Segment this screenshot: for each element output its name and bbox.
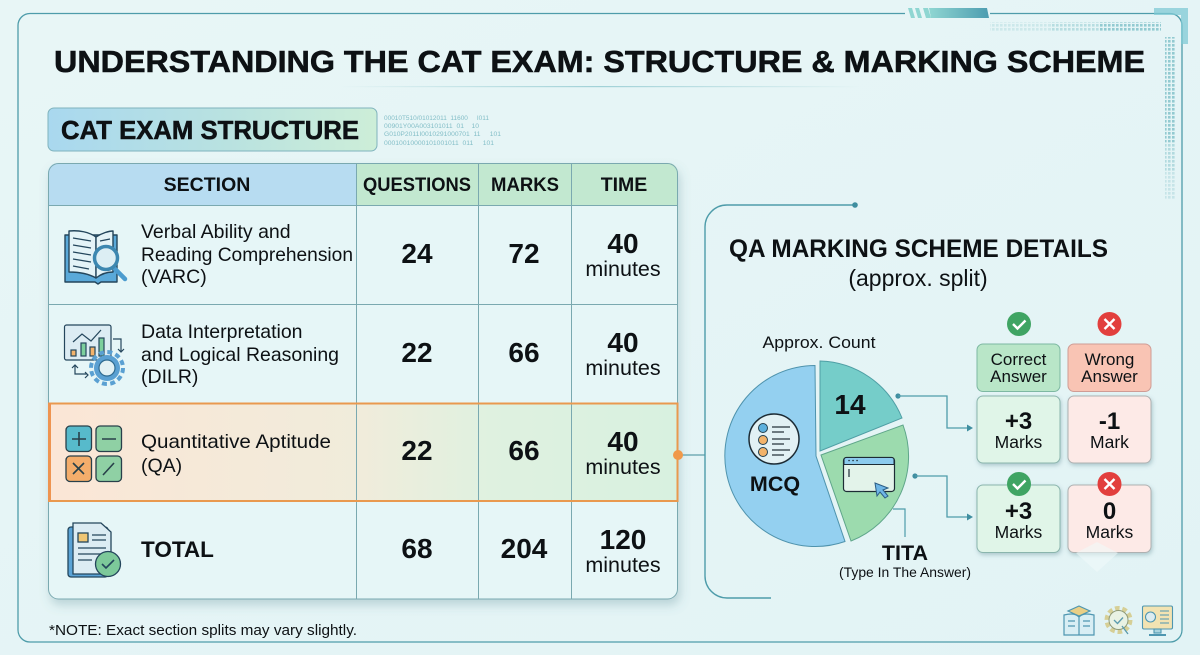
TITA label	[839, 509, 971, 580]
arrow: slice to TITA marks	[912, 473, 973, 520]
icon: correct check bottom	[1007, 472, 1031, 496]
table: exam structure	[48, 163, 678, 599]
table header: MARKS	[491, 174, 559, 196]
icon: correct check top	[1007, 312, 1031, 336]
table header: SECTION	[164, 174, 250, 196]
row: total: 68	[401, 533, 433, 564]
decorative binary text: G010P2011I0010291000701 11 101	[384, 131, 501, 138]
row: VARC: 72	[508, 238, 540, 269]
slice: MCQ: MCQ	[750, 472, 800, 496]
icon: answer window with cursor	[844, 458, 894, 498]
row: VARC	[65, 221, 661, 288]
row: DILR: minutes	[585, 356, 661, 380]
header card: correct answer: Correct	[991, 350, 1047, 369]
icon: wrong cross bottom	[1098, 472, 1122, 496]
row: QA highlighted: 66	[508, 435, 540, 466]
row: VARC: Reading Comprehension	[141, 244, 353, 266]
icon: book and graduation cap	[1064, 606, 1094, 635]
slice: MCQ	[725, 366, 845, 546]
icon: chart with gear	[64, 325, 124, 384]
header card: wrong answer: Answer	[1081, 367, 1138, 386]
header card: correct answer	[977, 344, 1060, 392]
row: QA highlighted: (QA)	[141, 455, 182, 477]
decorative binary text: 00010T510/01012011 11600 I011	[384, 115, 489, 122]
header card: wrong answer: Wrong	[1085, 350, 1134, 369]
card: TITA wrong 0: 0	[1103, 498, 1116, 525]
card: TITA correct +3: +3	[1005, 498, 1032, 525]
slice: 14	[820, 361, 902, 451]
arrow: slice to MCQ marks	[895, 393, 973, 432]
card: TITA wrong 0	[1068, 485, 1151, 572]
note: *NOTE: Exact section splits may vary slightly.	[49, 623, 357, 639]
connector from QA row to panel	[673, 450, 705, 460]
row: DILR: 66	[508, 337, 540, 368]
icon: monitor dashboard	[1142, 606, 1172, 635]
row: DILR: Data Interpretation	[141, 321, 303, 343]
row: DILR: and Logical Reasoning	[141, 344, 339, 366]
row: QA highlighted: 40	[607, 426, 639, 457]
icon: gear and bulb	[1107, 608, 1130, 634]
card: MCQ correct +3	[977, 396, 1060, 463]
slice: 14: 14	[834, 389, 866, 420]
title: UNDERSTANDING THE CAT EXAM: STRUCTURE & MARKING SCHEME	[54, 44, 1145, 79]
row: QA highlighted: minutes	[585, 455, 661, 479]
row: total: TOTAL	[141, 537, 214, 562]
icon: wrong cross top	[1098, 312, 1122, 336]
row: total: 204	[501, 533, 548, 564]
row: DILR: (DILR)	[141, 366, 198, 388]
table header: TIME	[601, 174, 647, 196]
row: total: minutes	[585, 553, 661, 577]
row: VARC: 40	[607, 228, 639, 259]
section heading: CAT exam structure	[48, 108, 377, 151]
pie label: Approx. Count	[762, 333, 876, 352]
row: total: 120	[600, 524, 646, 555]
TITA label: (Type In The Answer)	[839, 565, 971, 580]
panel bracket	[705, 202, 858, 598]
row: VARC: Verbal Ability and	[141, 221, 291, 243]
card: TITA correct +3: Marks	[995, 522, 1043, 542]
row: VARC: minutes	[585, 257, 661, 281]
row: DILR	[64, 321, 661, 388]
row: QA highlighted: Quantitative Aptitude	[141, 431, 331, 453]
row: total	[68, 523, 661, 577]
row: VARC: 24	[401, 238, 433, 269]
section heading: CAT exam structure: CAT EXAM STRUCTURE	[61, 115, 359, 145]
decorative binary text	[384, 115, 501, 147]
row: QA highlighted	[66, 426, 661, 482]
slice: TITA	[821, 425, 909, 541]
card: MCQ wrong -1: -1	[1099, 408, 1120, 435]
header card: correct answer: Answer	[990, 367, 1047, 386]
row: DILR: 22	[401, 337, 433, 368]
row: VARC: (VARC)	[141, 266, 207, 288]
pie chart	[725, 361, 909, 546]
TITA label: TITA	[882, 541, 928, 565]
decorative binary text: 00010010000101001011 011 101	[384, 140, 494, 147]
row: DILR: 40	[607, 327, 639, 358]
card: MCQ wrong -1: Mark	[1090, 432, 1129, 452]
header card: wrong answer	[1068, 344, 1151, 392]
card: MCQ correct +3: +3	[1005, 408, 1032, 435]
panel heading: QA MARKING SCHEME DETAILS	[729, 235, 1108, 263]
table header: QUESTIONS	[363, 174, 471, 196]
table header	[164, 174, 647, 196]
panel heading	[729, 235, 1108, 291]
icon: document with check	[68, 523, 120, 577]
panel heading: (approx. split)	[848, 265, 988, 291]
card: MCQ correct +3: Marks	[995, 432, 1043, 452]
icon: MCQ list	[749, 414, 799, 464]
row: QA highlighted: 22	[401, 435, 433, 466]
card: TITA correct +3	[977, 485, 1060, 552]
icon: open book with magnifier	[65, 231, 125, 284]
card: MCQ wrong -1	[1068, 396, 1151, 463]
icon: math operators	[66, 426, 122, 482]
card: TITA wrong 0: Marks	[1086, 522, 1134, 542]
decorative binary text: 00901Y00A003101011 01 10	[384, 123, 479, 130]
